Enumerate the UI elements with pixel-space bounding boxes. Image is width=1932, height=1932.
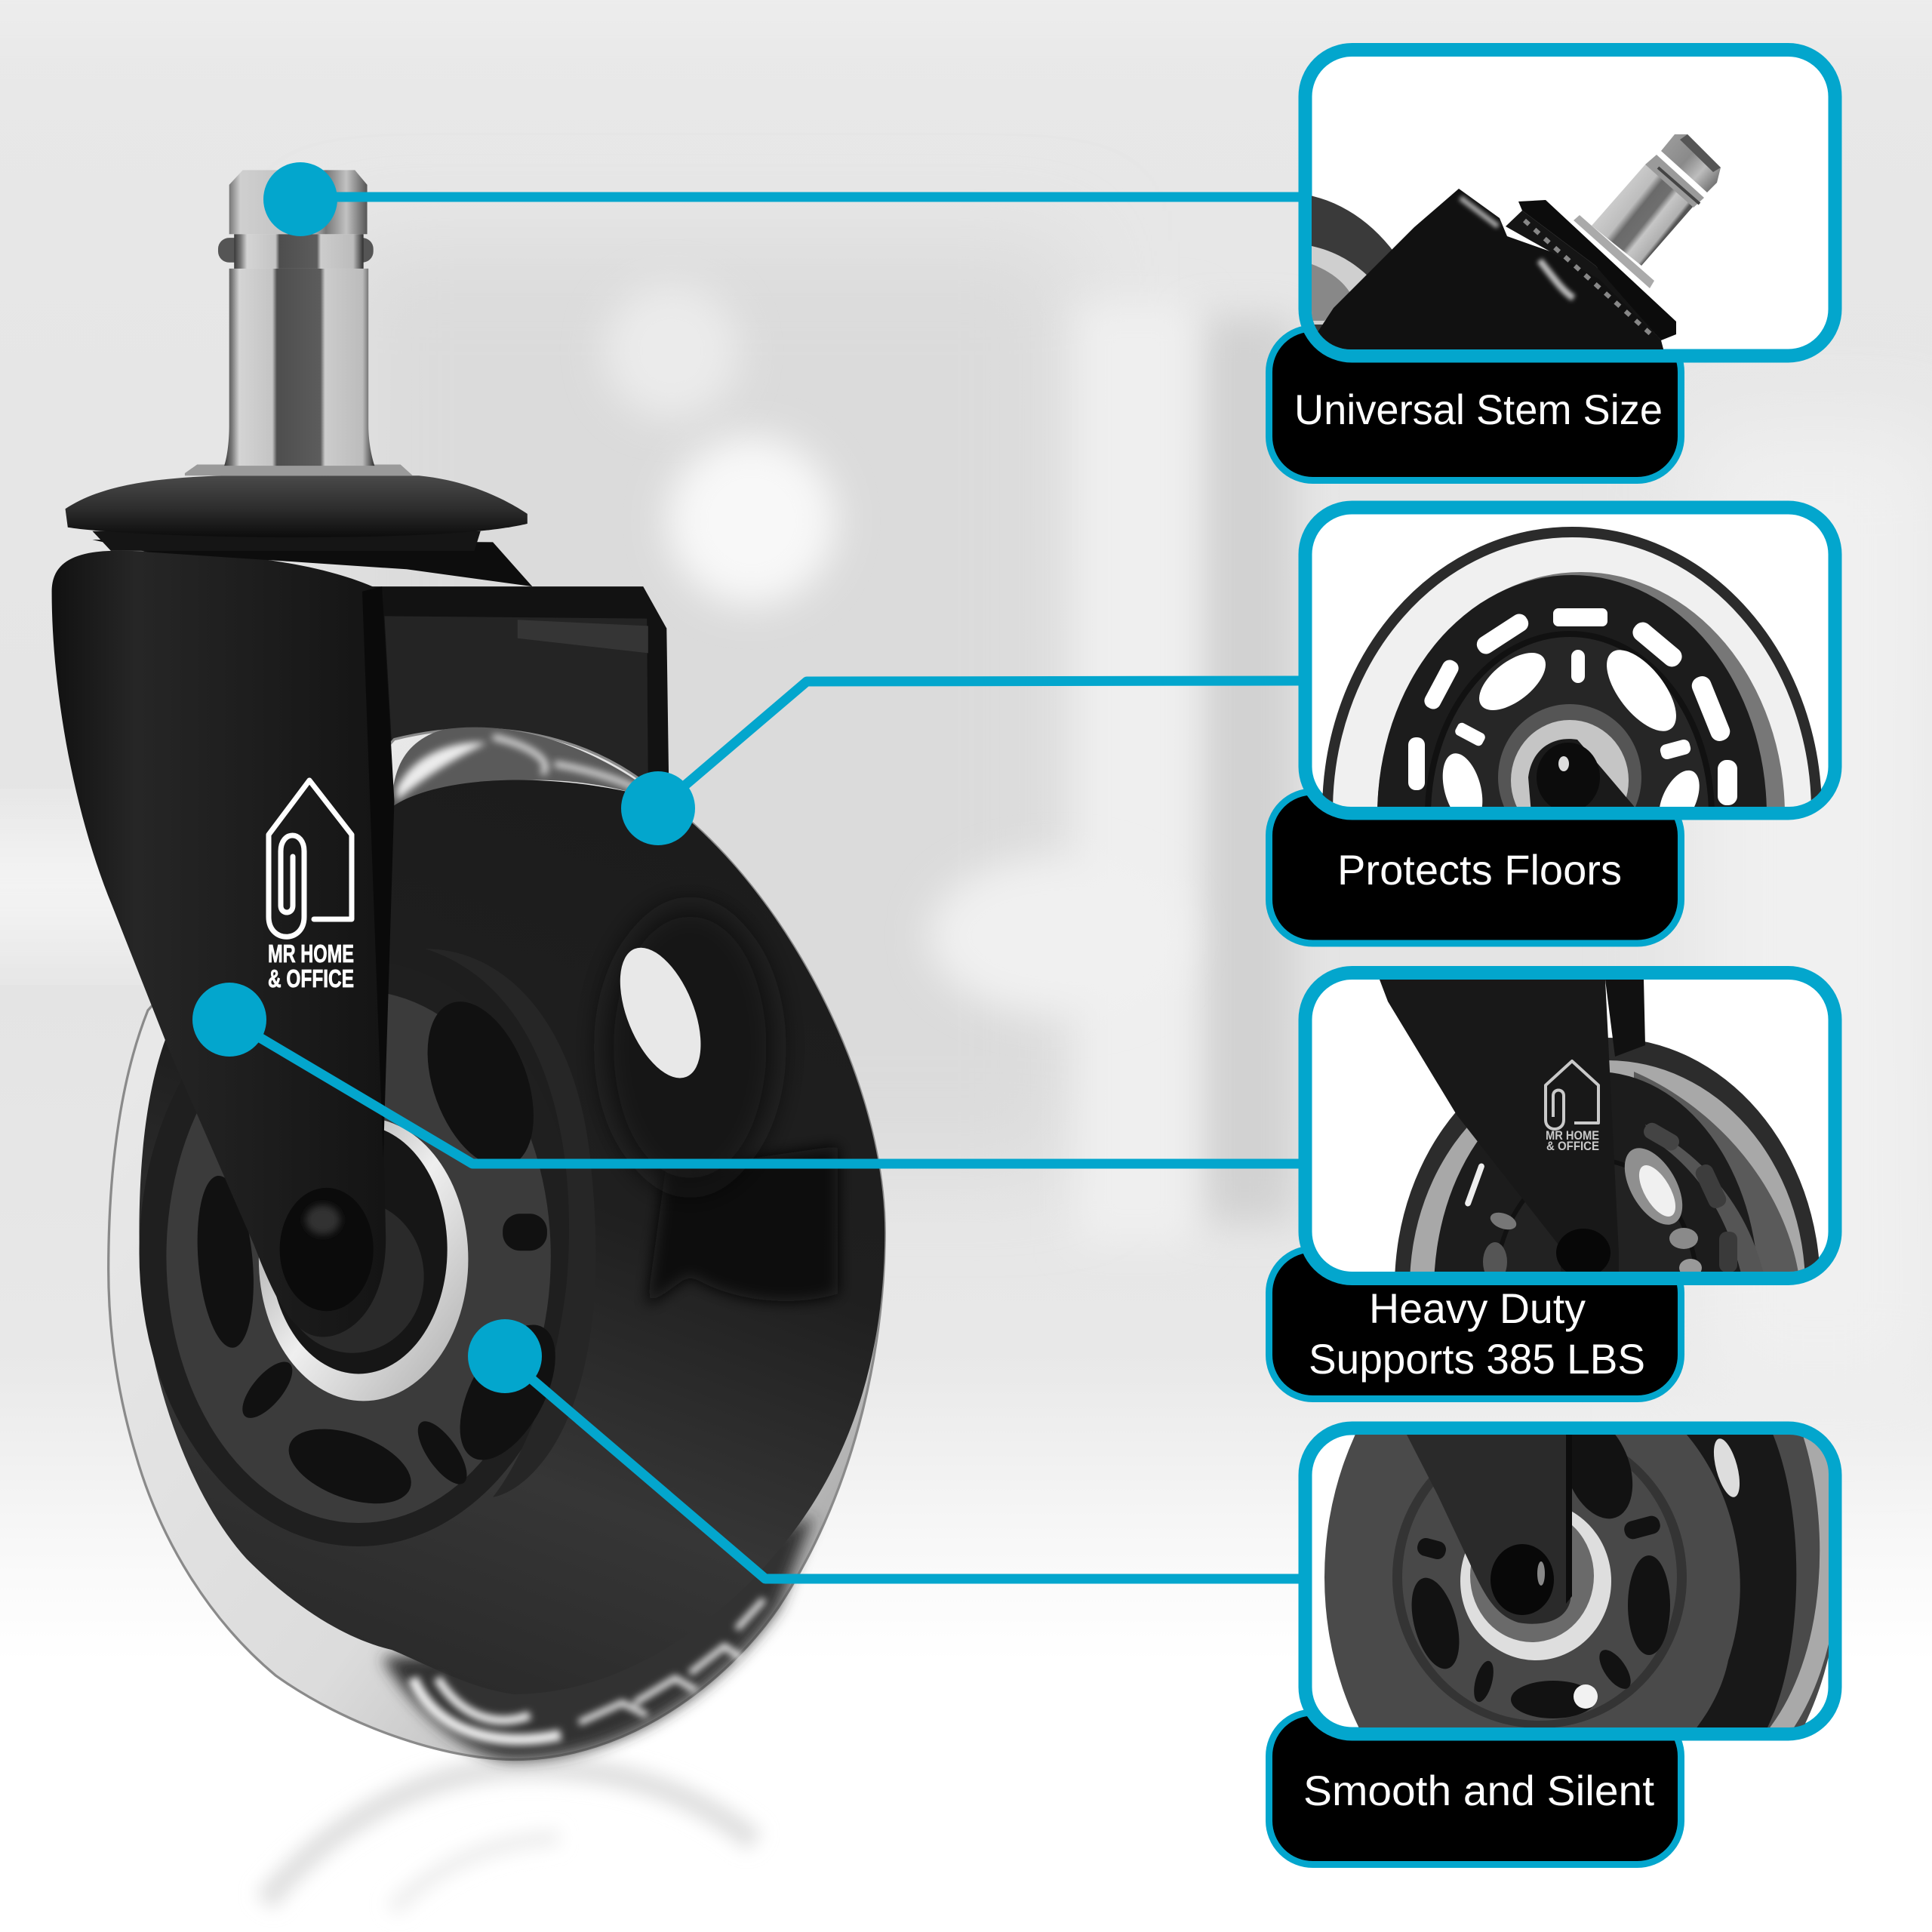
label: Heavy Duty xyxy=(1269,1249,1681,1399)
panel frame and photo: wheel floor contact xyxy=(1298,501,1841,820)
connector lines and dots xyxy=(192,162,1302,1579)
hub recess xyxy=(139,960,578,1546)
panel frame and photo: fork strength: MR HOME xyxy=(1546,1128,1599,1143)
dark reflection on tyre xyxy=(647,1146,838,1306)
label: Heavy Duty: Heavy Duty xyxy=(1369,1284,1586,1332)
stem clip ring xyxy=(218,238,374,263)
axle bolt xyxy=(280,1188,374,1311)
tyre body xyxy=(139,780,884,1694)
logo: Mr Home & Office: MR HOME xyxy=(268,940,354,968)
glossy spot xyxy=(604,937,717,1089)
washer xyxy=(185,465,413,475)
fork arm xyxy=(52,551,386,1337)
label: Universal Stem Size: Universal Stem Size xyxy=(1294,386,1663,433)
panel frame and photo: fork strength: & OFFICE xyxy=(1546,1139,1599,1153)
callout: Universal Stem Size xyxy=(1266,43,1841,484)
label: Smooth and Silent: Smooth and Silent xyxy=(1303,1767,1654,1814)
label: Protects Floors: Protects Floors xyxy=(1337,846,1622,894)
label: Universal Stem Size xyxy=(1269,328,1681,480)
callout: Protects Floors xyxy=(1266,501,1841,946)
label: Heavy Duty: Supports 385 LBS xyxy=(1309,1335,1645,1383)
callout: Heavy Duty Supports 385 LBS xyxy=(1266,966,1841,1402)
logo: Mr Home & Office xyxy=(268,780,354,992)
stem head xyxy=(229,170,368,234)
panel frame and photo: stem xyxy=(1298,43,1841,362)
reflection of wheel on floor xyxy=(265,1767,755,1909)
logo: Mr Home & Office: & OFFICE xyxy=(268,964,354,992)
bearing xyxy=(259,1118,468,1401)
hub openings xyxy=(191,987,575,1518)
label: Smooth and Silent xyxy=(1269,1712,1681,1864)
flange xyxy=(66,475,528,537)
panel frame and photo: hub and bearing xyxy=(1306,1277,1838,1878)
clear tread dark lower section xyxy=(382,1515,814,1759)
clear tread upper section xyxy=(392,728,672,814)
callout: Smooth and Silent xyxy=(1269,1277,1838,1878)
tread swirls at bottom xyxy=(413,1599,764,1740)
stem shaft xyxy=(224,269,374,466)
label: Protects Floors xyxy=(1269,792,1681,943)
panel frame and photo: fork strength xyxy=(1306,973,1835,1536)
product photo: office chair caster xyxy=(52,170,884,1759)
bearing race under fork xyxy=(92,540,532,586)
clear outer tread xyxy=(109,729,884,1759)
fork bracket behind wheel xyxy=(364,586,669,801)
